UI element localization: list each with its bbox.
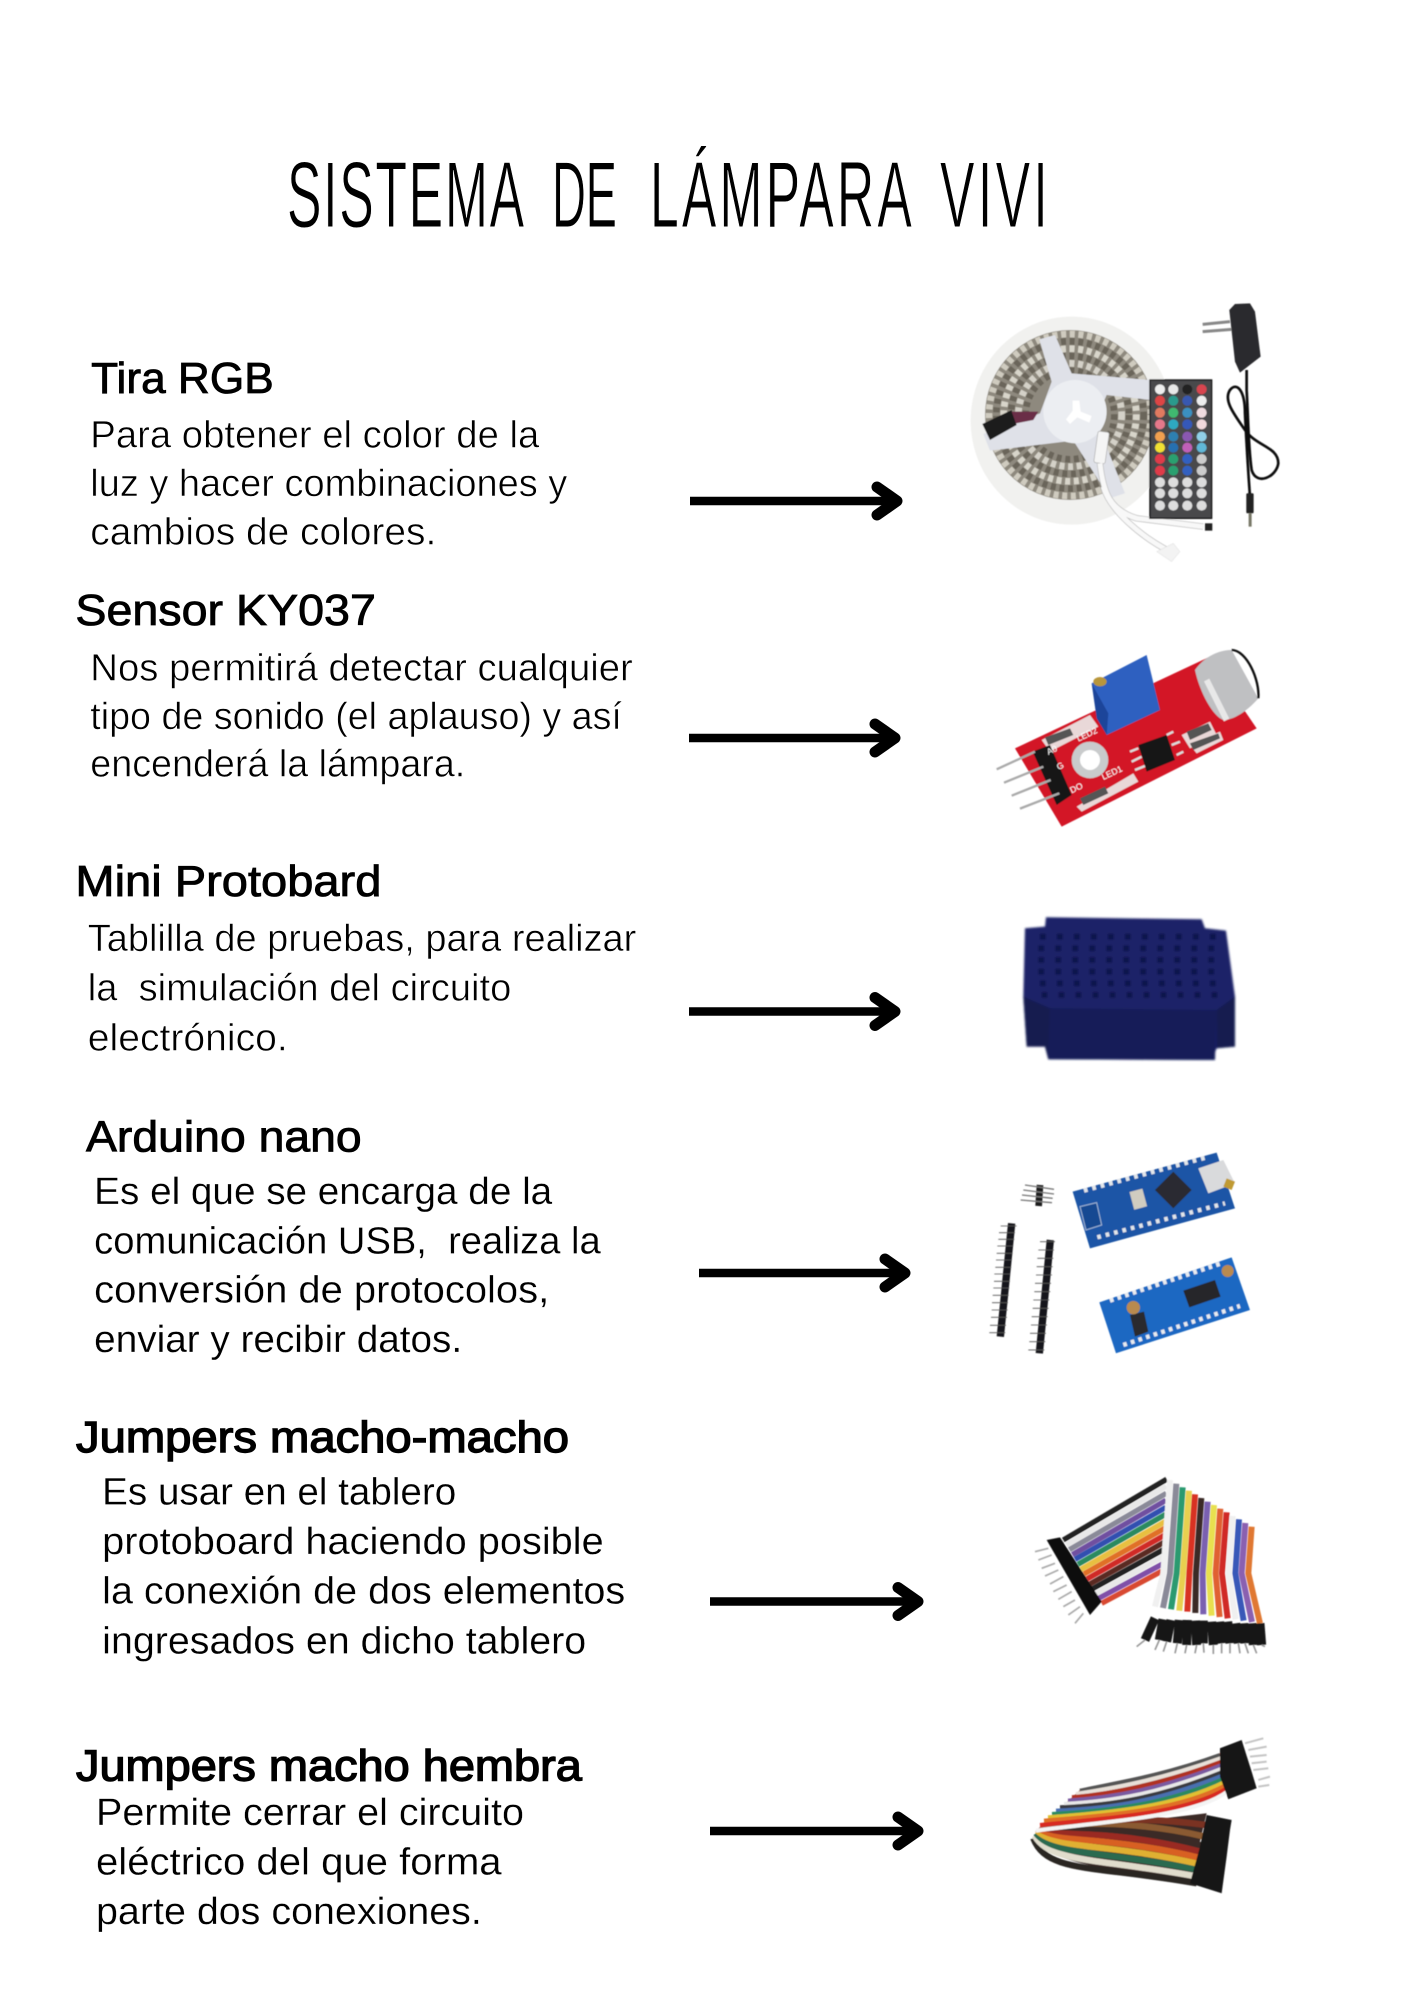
icon: KY037 sound sensor module: DO <box>1068 780 1085 795</box>
title: LÁMPARA <box>650 143 912 248</box>
icon: male-to-female jumper wires <box>1033 1738 1270 1893</box>
icon: RGB LED strip reel, remote and power adapter <box>971 303 1278 562</box>
text block: sensor description: encenderá la lámpara. <box>90 743 465 785</box>
icon: KY037 sound sensor module: A0 <box>1045 743 1059 757</box>
text block: Tira RGB description: luz y hacer combinaciones y <box>90 462 567 504</box>
text block: Arduino description <box>94 1170 601 1360</box>
text block: jumpers macho hembra description <box>96 1791 524 1932</box>
text block: jumpers macho-macho description: la conexión de dos elementos <box>102 1570 625 1612</box>
heading: Arduino nano: Arduino nano <box>86 1114 362 1162</box>
text block: jumpers macho hembra description: parte dos conexiones. <box>96 1890 482 1932</box>
panel: Jumpers macho hembra <box>76 1738 1270 1932</box>
heading: Jumpers macho-macho: Jumpers macho-macho <box>76 1414 569 1462</box>
icon: KY037 sound sensor module: LED1 <box>1100 764 1124 782</box>
text block: Arduino description: comunicación USB, realiza la <box>94 1220 601 1262</box>
text block: sensor description: tipo de sonido (el aplauso) y así <box>90 695 622 737</box>
title: DE <box>552 142 617 247</box>
icon: mini protoboard <box>1023 917 1235 1060</box>
text block: sensor description: Nos permitirá detectar cualquier <box>90 646 633 688</box>
title <box>287 142 1048 248</box>
icon: KY037 sound sensor module: G <box>1055 760 1066 772</box>
panel: Mini Protobard <box>75 858 1235 1060</box>
arrow <box>689 998 895 1026</box>
heading: Sensor KY037: Sensor KY037 <box>75 587 376 635</box>
heading: Jumpers macho hembra: Jumpers macho hembra <box>76 1742 583 1790</box>
text block: jumpers macho-macho description <box>102 1471 625 1661</box>
text block: Tira RGB description <box>90 414 567 552</box>
text block: Arduino description: enviar y recibir datos. <box>94 1318 462 1360</box>
icon: KY037 sound sensor module: LED2 <box>1075 725 1099 743</box>
text block: Arduino description: Es el que se encarga de la <box>94 1170 552 1212</box>
title: VIVI <box>940 143 1048 248</box>
arrow <box>690 487 897 515</box>
title: SISTEMA <box>287 143 524 248</box>
text block: protoboard description <box>88 917 636 1058</box>
text block: jumpers macho hembra description: eléctrico del que forma <box>96 1840 502 1882</box>
panel: Arduino nano <box>86 1114 1250 1360</box>
text block: protoboard description: la simulación del circuito <box>88 967 511 1009</box>
icon: KY037 sound sensor module <box>997 650 1258 827</box>
text block: jumpers macho-macho description: Es usar en el tablero <box>102 1471 456 1513</box>
arrow <box>689 724 895 752</box>
text block: jumpers macho-macho description: ingresados en dicho tablero <box>102 1619 586 1661</box>
arrow <box>710 1817 918 1845</box>
text block: sensor description <box>90 646 633 785</box>
heading: Mini Protobard: Mini Protobard <box>75 858 381 906</box>
icon: Arduino nano boards and pin headers <box>989 1153 1250 1353</box>
text block: protoboard description: Tablilla de pruebas, para realizar <box>88 917 636 959</box>
text block: Tira RGB description: Para obtener el color de la <box>90 414 539 456</box>
text block: Arduino description: conversión de protocolos, <box>94 1268 549 1310</box>
arrow <box>710 1588 918 1616</box>
panel: Sensor KY037 <box>75 587 1258 827</box>
text block: protoboard description: electrónico. <box>88 1016 288 1058</box>
text block: jumpers macho hembra description: Permite cerrar el circuito <box>96 1791 524 1833</box>
text block: jumpers macho-macho description: protoboard haciendo posible <box>102 1520 604 1562</box>
panel: Tira RGB <box>90 303 1278 562</box>
icon: male-to-male jumper wires <box>1035 1479 1265 1654</box>
heading: Tira RGB: Tira RGB <box>91 355 274 403</box>
text block: Tira RGB description: cambios de colores. <box>90 510 436 552</box>
panel: Jumpers macho-macho <box>76 1414 1265 1661</box>
arrow <box>699 1259 905 1287</box>
